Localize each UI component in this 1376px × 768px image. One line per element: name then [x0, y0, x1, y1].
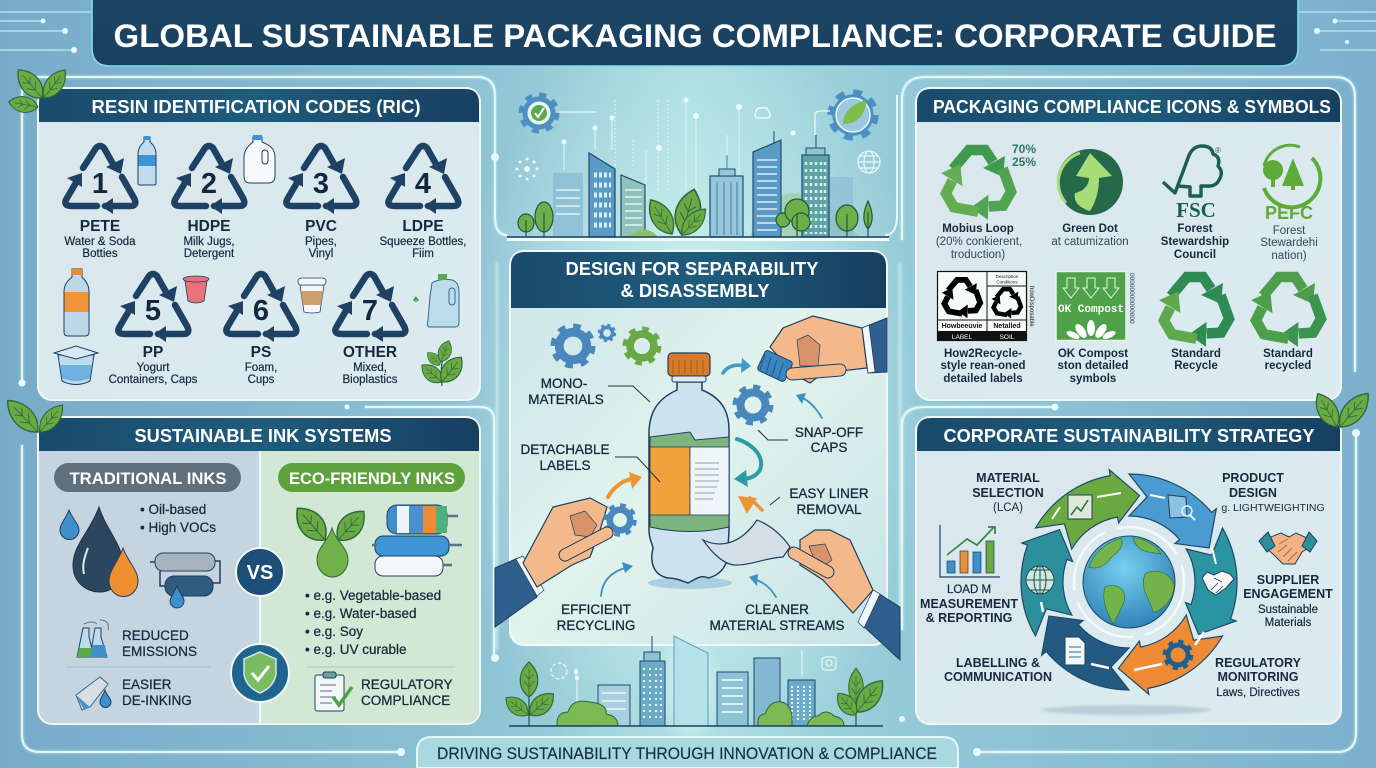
label: product design	[1221, 471, 1325, 514]
heading: strategy	[917, 418, 1340, 451]
panel: corporate sustainability strategy	[916, 417, 1341, 724]
icon: mobius loop	[936, 142, 1036, 223]
icon: red cup	[183, 276, 209, 303]
label: green dot: Green Dot	[1062, 223, 1118, 235]
label: how2recycle: How2Recycle-	[944, 348, 1022, 360]
buildings	[553, 131, 860, 237]
code 7 OTHER: Bioplastics	[343, 374, 398, 386]
text: eco ink bullets: • e.g. Water-based	[305, 606, 417, 621]
icon: how2recycle label: SOIL	[1000, 334, 1015, 341]
icon: FSC logo	[1163, 146, 1221, 222]
code 1 PETE	[64, 146, 136, 260]
code 6 PS: Foam,	[245, 362, 277, 374]
badge: shield check	[231, 644, 289, 702]
heading: strategy: CORPORATE SUSTAINABILITY STRATEGY	[944, 426, 1314, 446]
shadow	[1042, 705, 1212, 715]
label: cleaner material streams: CLEANER	[745, 602, 809, 617]
label: PEFC: Stewardehi	[1260, 237, 1318, 249]
icon: how2recycle label: Howbeeuvie	[942, 323, 983, 330]
label: mobius loop: Mobius Loop	[942, 223, 1014, 235]
pill: traditional	[54, 463, 241, 492]
icon: oil drops	[60, 507, 138, 597]
icon: FSC logo: ®	[1215, 146, 1221, 155]
title banner	[92, 0, 1298, 66]
column: eco-friendly inks	[278, 463, 465, 711]
text: eco ink bullets: • e.g. Soy	[305, 624, 363, 639]
code 5 PP: 5	[145, 295, 161, 327]
icon: flasks	[77, 620, 108, 657]
code 5 PP: PP	[143, 344, 163, 361]
code 6 PS	[226, 274, 296, 386]
label: easy liner removal: EASY LINER	[789, 486, 869, 501]
label: easy liner removal	[789, 486, 869, 517]
icon: gears	[553, 325, 771, 423]
label: labelling and communication: COMMUNICATION	[944, 670, 1052, 684]
label: measurement and reporting	[920, 584, 1018, 625]
code 5 PP: Yogurt	[137, 362, 170, 374]
code 6 PS: Cups	[248, 374, 275, 386]
illustration: top right hand with cap	[757, 316, 887, 383]
badge: VS	[236, 548, 284, 596]
label: product design: PRODUCT	[1222, 471, 1284, 485]
banner text: DRIVING SUSTAINABILITY THROUGH INNOVATION & COMPLIANCE	[437, 745, 937, 763]
icon: milk jug	[244, 135, 275, 183]
heading: separability: DESIGN FOR SEPARABILITY	[566, 259, 818, 279]
text: reduced emissions: EMISSIONS	[122, 644, 197, 659]
label: detachable labels: LABELS	[539, 458, 591, 473]
label: easy liner removal: REMOVAL	[796, 502, 862, 517]
code 4 LDPE: Fiim	[412, 248, 434, 260]
illustration: bottom city skyline	[501, 630, 890, 750]
label: PEFC: nation)	[1271, 250, 1307, 262]
label: standard recycle: Recycle	[1174, 360, 1218, 372]
code 5 PP	[109, 274, 198, 386]
icon: small globe	[1026, 566, 1054, 594]
code 3 PVC	[286, 146, 356, 260]
label: supplier engagement: Sustainable	[1258, 604, 1318, 616]
icon: orange bottle	[64, 269, 89, 336]
heading: ink systems: SUSTAINABLE INK SYSTEMS	[134, 426, 392, 446]
icon: mobius loop: 70%	[1012, 142, 1036, 156]
label: supplier engagement	[1243, 573, 1333, 629]
pill: eco-friendly: ECO-FRIENDLY INKS	[289, 470, 455, 488]
icon: PEFC logo: PEFC	[1265, 203, 1313, 223]
illustration: bottle	[648, 353, 732, 589]
callout lines	[608, 386, 788, 505]
text: oil-based bullets: • Oil-based	[140, 502, 206, 517]
label: FSC: Council	[1174, 249, 1216, 261]
code 1 PETE: Water & Soda	[64, 236, 136, 248]
icon: how2recycle label: Description	[996, 274, 1019, 279]
label: FSC	[1161, 223, 1229, 261]
icon: how2recycle label: howDisposable	[1028, 286, 1034, 327]
text: reduced emissions	[122, 628, 197, 659]
heading: RIC: RESIN IDENTIFICATION CODES (RIC)	[92, 97, 421, 117]
label: measurement and reporting: MEASUREMENT	[920, 597, 1018, 611]
arrows: curved	[601, 358, 822, 597]
label: material selection: (LCA)	[993, 502, 1023, 514]
illustration: left hand with gear	[495, 498, 635, 627]
code 7 OTHER: 7	[362, 295, 378, 327]
label: mobius loop	[936, 223, 1022, 261]
text: eco ink bullets: • e.g. UV curable	[305, 642, 407, 657]
heading: separability	[511, 252, 886, 308]
icon: handshake	[1259, 532, 1317, 564]
label: cleaner material streams: MATERIAL STREAMS	[709, 618, 845, 633]
code 5 PP: Containers, Caps	[109, 374, 198, 386]
icon: print rollers	[372, 505, 462, 576]
panel: design for separability	[495, 251, 900, 660]
code 2 HDPE: 2	[201, 168, 217, 200]
label: supplier engagement: ENGAGEMENT	[1243, 587, 1333, 601]
label: detachable labels	[520, 442, 610, 473]
code 4 LDPE	[380, 146, 466, 260]
icon: water bottle	[138, 136, 156, 185]
label: snap-off caps	[795, 425, 863, 455]
label: material selection	[972, 471, 1044, 514]
icon: handshake on cycle	[1202, 571, 1234, 595]
icon: mobius loop: 25%	[1012, 155, 1036, 169]
code 4 LDPE: 4	[415, 168, 431, 200]
pill: eco-friendly	[278, 463, 465, 492]
label: measurement and reporting: LOAD M	[947, 584, 991, 596]
text: reduced emissions: REDUCED	[122, 628, 189, 643]
bushes	[557, 701, 844, 726]
label: green dot	[1051, 223, 1129, 248]
label: FSC: Stewardship	[1161, 236, 1229, 248]
label: FSC: Forest	[1177, 223, 1213, 235]
illustration: peeling liner	[703, 520, 790, 565]
code 3 PVC: 3	[313, 168, 329, 200]
label: OK compost	[1058, 348, 1128, 385]
label: standard recycled: recycled	[1265, 360, 1311, 372]
label: efficient recycling: EFFICIENT	[561, 602, 631, 617]
code 6 PS: PS	[251, 344, 271, 361]
label: how2recycle: style rean-oned	[940, 360, 1026, 372]
label: material selection: MATERIAL	[976, 471, 1040, 485]
code 2 HDPE	[174, 146, 244, 260]
illustration: right hand holding liner	[794, 530, 900, 660]
text: eco ink bullets	[305, 588, 441, 657]
code 4 LDPE: LDPE	[402, 218, 444, 235]
label: snap-off caps: SNAP-OFF	[795, 425, 863, 440]
icon: how2recycle label	[938, 272, 1034, 341]
ground line	[507, 236, 889, 238]
illustration: top city skyline	[507, 92, 889, 241]
chart: strategy cycle	[985, 445, 1273, 719]
icon: FSC logo: FSC	[1176, 198, 1216, 222]
icon: how2recycle label: Netalled	[993, 323, 1021, 330]
label: regulatory monitoring	[1215, 656, 1302, 699]
icon: OK compost: OK Compost	[1058, 304, 1124, 316]
icon: product search	[1168, 495, 1195, 520]
panel: packaging compliance icons	[916, 88, 1341, 400]
code 7 OTHER: OTHER	[343, 344, 397, 361]
label: OK compost: ston detailed	[1058, 360, 1128, 372]
icon: dots cluster	[516, 158, 538, 180]
icon: globe outline	[858, 151, 880, 173]
label: measurement and reporting: & REPORTING	[926, 611, 1012, 625]
label: mobius loop: (20% conkierent,	[936, 236, 1022, 248]
label: supplier engagement: SUPPLIER	[1257, 573, 1319, 587]
code 1 PETE: 1	[92, 168, 108, 200]
label: PEFC: Forest	[1273, 225, 1306, 237]
icon: OK compost	[1056, 272, 1135, 341]
icon: how2recycle label: Conditions	[996, 280, 1018, 284]
text: regulatory compliance: REGULATORY	[361, 677, 453, 692]
icon: green dot	[1057, 149, 1123, 215]
code 3 PVC: PVC	[305, 218, 337, 235]
label: product design: DESIGN	[1229, 486, 1277, 500]
icon: standard recycle	[1154, 277, 1237, 350]
panel: sustainable ink systems	[38, 417, 480, 724]
text: easier de-inking: DE-INKING	[122, 693, 192, 708]
panel: resin identification codes	[38, 88, 480, 400]
heading: compliance icons: PACKAGING COMPLIANCE ICONS & SYMBOLS	[933, 97, 1331, 117]
icon: yogurt tub	[54, 346, 98, 384]
label: efficient recycling: RECYCLING	[557, 618, 635, 633]
icon: plastic jug: ♣	[413, 294, 419, 304]
icon: PEFC logo	[1263, 145, 1320, 223]
icon: coffee cup	[298, 278, 326, 313]
code 1 PETE: Botties	[82, 248, 118, 260]
label: how2recycle	[940, 348, 1026, 385]
label: efficient recycling	[557, 602, 635, 633]
code 3 PVC: Pipes,	[305, 236, 337, 248]
code 6 PS: 6	[253, 295, 269, 327]
label: standard recycled	[1263, 348, 1313, 372]
icon: leaf gear badge	[815, 92, 876, 138]
icon: document chart	[1068, 495, 1092, 519]
icon: roller	[150, 553, 220, 608]
label: supplier engagement: Materials	[1265, 617, 1312, 629]
decoration: top-left leaves	[7, 64, 72, 115]
bottom banner	[417, 737, 958, 768]
label: labelling and communication	[944, 656, 1052, 684]
code 1 PETE: PETE	[80, 218, 120, 235]
label: mono-materials: MONO-	[541, 376, 587, 391]
icon: clipboard	[315, 672, 352, 711]
plant: left sprout	[501, 662, 559, 726]
column: traditional inks	[54, 463, 241, 710]
label: green dot: at catumization	[1051, 236, 1129, 248]
icon: de-inking tool	[76, 677, 111, 710]
text: regulatory compliance: COMPLIANCE	[361, 693, 450, 708]
icon: how2recycle label: LABEL	[952, 334, 972, 341]
icon: standard recycled	[1246, 277, 1329, 350]
label: OK compost: symbols	[1070, 373, 1116, 385]
code 3 PVC: Vinyl	[309, 248, 333, 260]
icon: check gear badge	[521, 95, 596, 131]
label: material selection: SELECTION	[972, 486, 1044, 500]
code 7 OTHER	[335, 274, 405, 386]
text: oil-based bullets: • High VOCs	[140, 520, 216, 535]
label: how2recycle: detailed labels	[943, 373, 1023, 385]
badge: VS: VS	[247, 562, 273, 584]
heading: ink systems	[39, 418, 479, 451]
icon: cloud	[755, 108, 770, 118]
label: labelling and communication: LABELLING &	[956, 656, 1040, 670]
code 7 OTHER: Mixed,	[353, 362, 387, 374]
code 2 HDPE: HDPE	[187, 218, 231, 235]
heading: separability: & DISASSEMBLY	[620, 281, 770, 301]
icon: plastic jug	[413, 274, 459, 327]
text: oil-based bullets	[140, 502, 216, 535]
plant: center leaves	[628, 186, 711, 240]
label: standard recycle	[1171, 348, 1221, 372]
text: eco ink bullets: • e.g. Vegetable-based	[305, 588, 441, 603]
label: standard recycled: Standard	[1263, 348, 1313, 360]
label: PEFC	[1260, 225, 1318, 262]
pill: traditional: TRADITIONAL INKS	[70, 470, 226, 488]
text: regulatory compliance	[361, 677, 453, 708]
code 2 HDPE: Detergent	[184, 248, 235, 260]
label: detachable labels: DETACHABLE	[520, 442, 610, 457]
label: regulatory monitoring: MONITORING	[1217, 670, 1299, 684]
icon: document	[1065, 637, 1085, 665]
trees	[518, 199, 872, 237]
label: standard recycle: Standard	[1171, 348, 1221, 360]
label: mono-materials	[528, 376, 604, 407]
icon: green sprig	[417, 338, 468, 388]
plant: right sprout	[832, 668, 890, 726]
icon: leaf drop	[289, 501, 372, 577]
code 2 HDPE: Milk Jugs,	[183, 236, 235, 248]
title: GLOBAL SUSTAINABLE PACKAGING COMPLIANCE: CORPORATE GUIDE	[114, 18, 1276, 54]
text: easier de-inking	[122, 677, 192, 708]
label: regulatory monitoring: Laws, Directives	[1216, 687, 1300, 699]
label: mono-materials: MATERIALS	[528, 392, 604, 407]
heading: RIC	[39, 89, 479, 122]
label: cleaner material streams	[709, 602, 845, 633]
heading: compliance icons	[917, 89, 1340, 122]
text: easier de-inking: EASIER	[122, 677, 172, 692]
label: regulatory monitoring: REGULATORY	[1215, 656, 1302, 670]
icons: faint symbols	[551, 657, 836, 679]
label: snap-off caps: CAPS	[811, 440, 847, 455]
icon: bar chart	[940, 525, 1000, 577]
icon: earth	[1083, 536, 1175, 628]
decoration: mid-left leaves	[1, 394, 68, 439]
label: mobius loop: troduction)	[951, 249, 1005, 261]
label: OK compost: OK Compost	[1058, 348, 1128, 360]
label: product design: g. LIGHTWEIGHTING	[1221, 502, 1325, 514]
icon: gear on cycle	[1164, 642, 1192, 668]
decoration: right leaves	[1310, 387, 1376, 433]
code 4 LDPE: Squeeze Bottles,	[380, 236, 466, 248]
icon: OK compost: 00000000000000	[1128, 273, 1135, 324]
